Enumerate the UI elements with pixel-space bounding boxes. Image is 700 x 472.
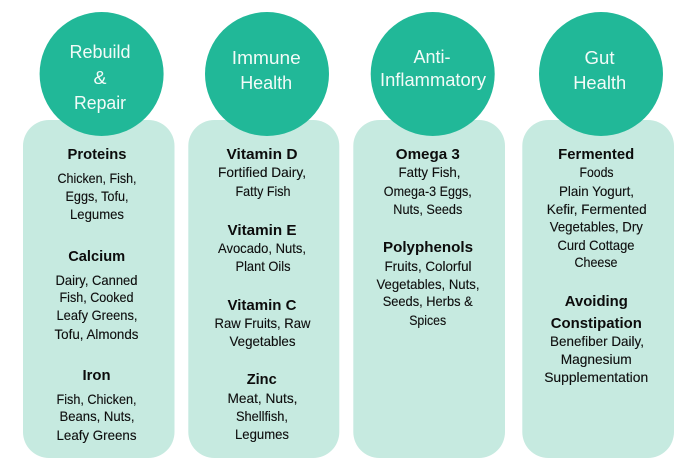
panel: immune health [188, 12, 339, 458]
text: fermented foods: Foods [580, 164, 614, 180]
text: avoiding constipation: Benefiber Daily, [550, 333, 644, 349]
text: calcium: Leafy Greens, [56, 307, 138, 323]
text: polyphenols: Seeds, Herbs & [383, 293, 473, 309]
circle: anti-inflammatory: Anti- [414, 46, 450, 67]
text: calcium: Dairy, Canned [56, 272, 138, 288]
text: vitamin d [218, 147, 306, 199]
circle: immune health [205, 12, 329, 136]
text: proteins: Legumes [70, 206, 124, 222]
text: polyphenols: Polyphenols [383, 240, 473, 256]
circle: gut health [539, 12, 663, 136]
text: vitamin e [218, 223, 306, 274]
text: fermented foods: Curd Cottage [558, 237, 635, 253]
text: iron: Fish, Chicken, [56, 391, 136, 407]
panel: anti-inflammatory [353, 12, 505, 458]
circle: immune health: Immune [232, 47, 301, 68]
text: calcium: Calcium [68, 249, 125, 265]
text: proteins: Eggs, Tofu, [66, 188, 128, 204]
text: fermented foods: Cheese [574, 254, 618, 270]
text: omega 3: Nuts, Seeds [393, 201, 462, 217]
text: omega 3 [384, 147, 472, 217]
text: calcium: Tofu, Almonds [54, 326, 139, 342]
circle: rebuild and repair: Rebuild [70, 41, 130, 62]
circle: anti-inflammatory [371, 12, 495, 136]
text: zinc: Zinc [247, 372, 277, 388]
text: vitamin e: Avocado, Nuts, [218, 240, 306, 256]
circle: rebuild and repair [40, 12, 164, 136]
text: vitamin d: Fortified Dairy, [218, 164, 306, 180]
text: vitamin e: Plant Oils [236, 258, 291, 274]
text: iron [56, 368, 137, 443]
text: vitamin c: Vegetables [230, 333, 296, 349]
text: vitamin c [214, 298, 311, 349]
circle: immune health: Health [240, 72, 292, 93]
text: vitamin d: Fatty Fish [236, 183, 290, 199]
text: omega 3: Omega-3 Eggs, [384, 183, 472, 199]
text: proteins: Chicken, Fish, [58, 170, 136, 186]
text: omega 3: Fatty Fish, [398, 164, 460, 180]
text: zinc [228, 372, 298, 442]
circle: rebuild and repair: & [94, 67, 107, 88]
text: zinc: Shellfish, [236, 408, 288, 424]
text: fermented foods: Vegetables, Dry [550, 218, 643, 234]
text: proteins: Proteins [68, 147, 126, 163]
text: vitamin e: Vitamin E [228, 223, 297, 239]
text: fermented foods: Kefir, Fermented [547, 201, 647, 217]
text: vitamin d: Vitamin D [226, 147, 298, 163]
text: avoiding constipation: Magnesium [561, 351, 632, 367]
text: omega 3: Omega 3 [396, 147, 460, 163]
text: calcium: Fish, Cooked [60, 289, 134, 305]
text: avoiding constipation [544, 294, 648, 385]
text: zinc: Meat, Nuts, [228, 390, 298, 406]
text: polyphenols [376, 240, 480, 328]
text: iron: Iron [82, 368, 110, 384]
text: polyphenols: Vegetables, Nuts, [376, 276, 480, 292]
circle: anti-inflammatory: Inflammatory [380, 69, 487, 90]
text: avoiding constipation: Supplementation [544, 369, 648, 385]
text: calcium [54, 249, 139, 342]
text: polyphenols: Fruits, Colorful [384, 258, 472, 274]
text: proteins [58, 147, 136, 222]
text: avoiding constipation: Constipation [551, 316, 642, 332]
text: avoiding constipation: Avoiding [565, 294, 628, 310]
text: polyphenols: Spices [409, 312, 446, 328]
panel: rebuild and repair [23, 12, 174, 458]
text: fermented foods: Fermented [558, 147, 634, 163]
circle: rebuild and repair: Repair [74, 92, 126, 113]
text: fermented foods: Plain Yogurt, [559, 183, 634, 199]
text: zinc: Legumes [235, 426, 289, 442]
circle: gut health: Health [573, 72, 626, 93]
panel: gut health [522, 12, 674, 458]
text: iron: Leafy Greens [56, 427, 137, 443]
text: iron: Beans, Nuts, [60, 408, 134, 424]
text: fermented foods [547, 147, 647, 270]
text: vitamin c: Vitamin C [228, 298, 297, 314]
text: vitamin c: Raw Fruits, Raw [214, 315, 311, 331]
circle: gut health: Gut [584, 47, 614, 68]
